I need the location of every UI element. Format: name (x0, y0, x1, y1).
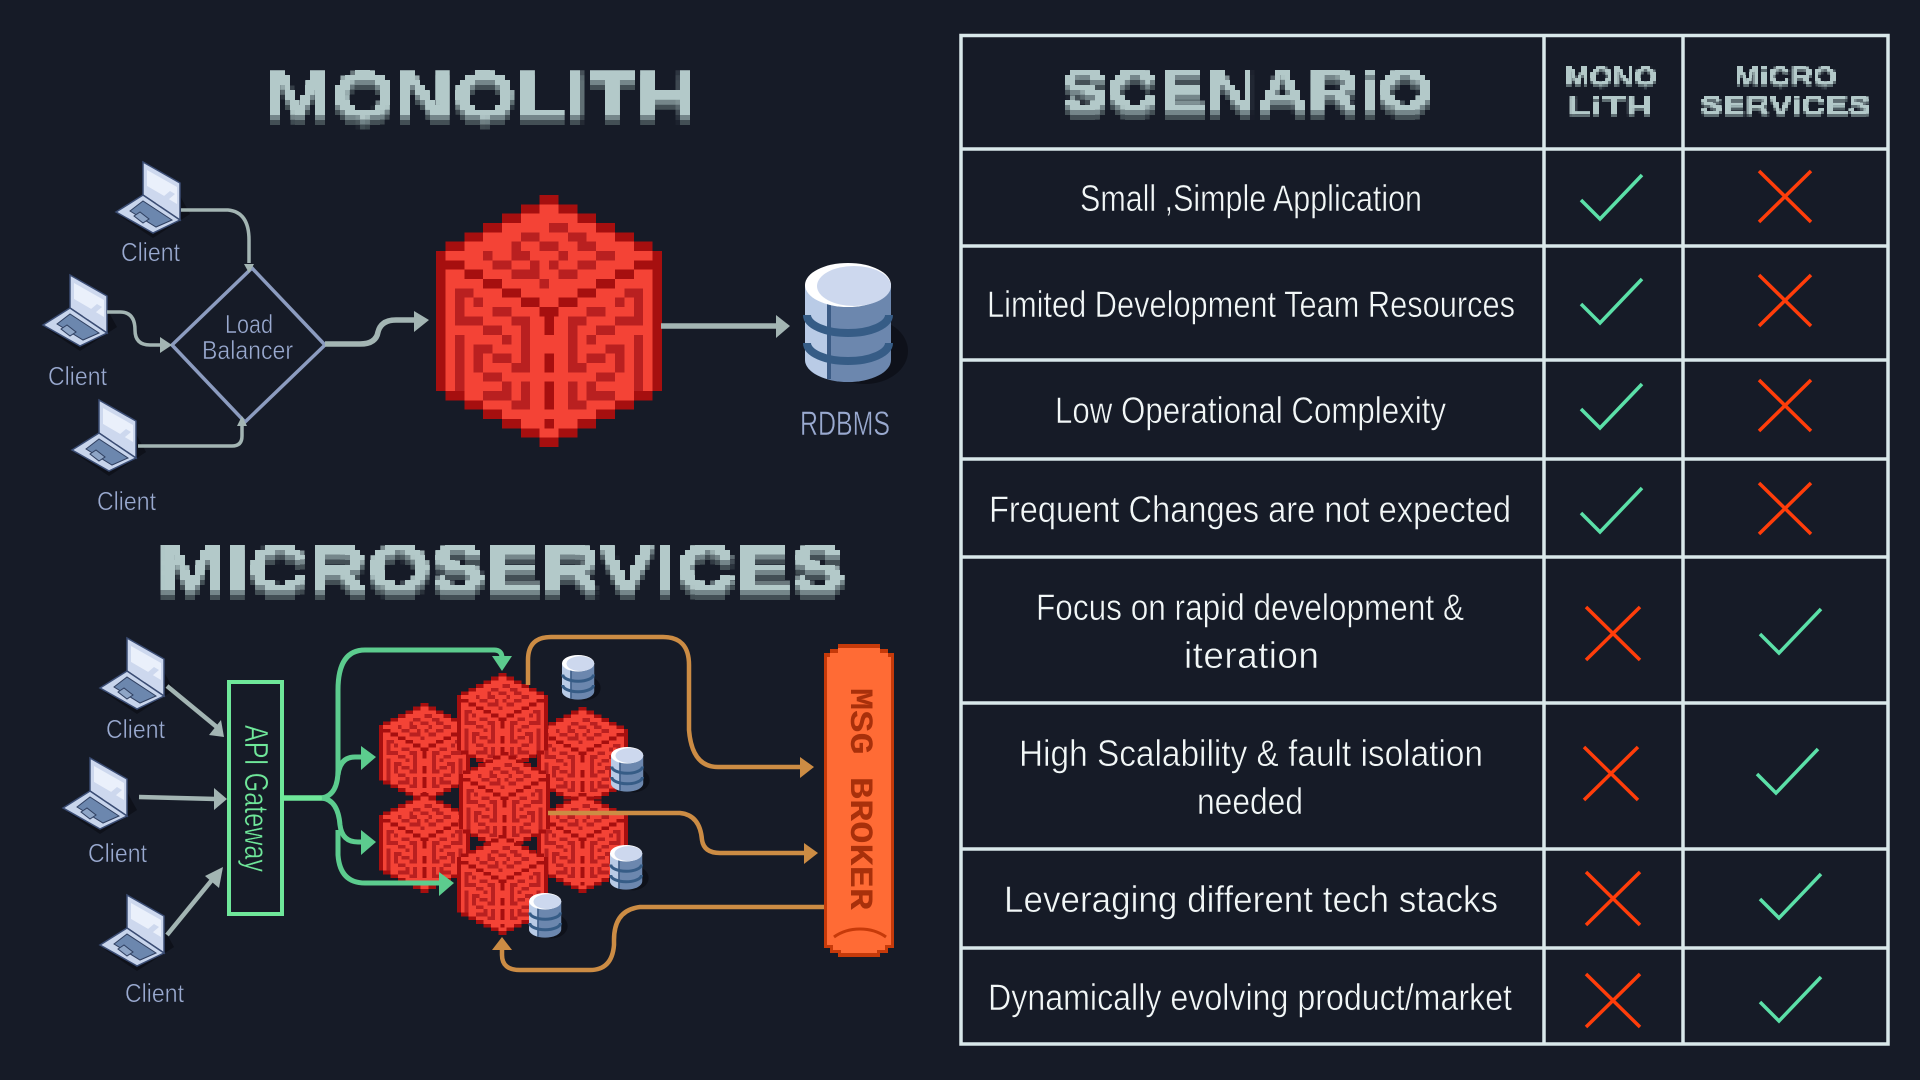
label: rdbms: RDBMS (800, 405, 890, 443)
scenario labels: Dynamically evolving product/market (988, 977, 1513, 1018)
orange broker arrows (492, 637, 824, 970)
arrow: balancer to monolith (325, 311, 429, 344)
header: scenario: SCENARiO (1061, 58, 1433, 121)
panel: comparison table (961, 36, 1888, 1044)
message broker (824, 644, 894, 957)
panel: microservices (63, 531, 894, 1008)
client labels: Client (121, 237, 181, 267)
load balancer diamond: Balancer (202, 335, 293, 365)
table grid (961, 36, 1888, 1044)
green gateway arrows (283, 650, 512, 896)
header: monolith (1565, 61, 1657, 121)
scenario labels: Low Operational Complexity (1055, 390, 1446, 431)
scenario labels: Frequent Changes are not expected (989, 489, 1511, 530)
load balancer diamond (172, 268, 325, 422)
client labels: Client (48, 361, 108, 391)
small databases (529, 655, 650, 938)
icon: laptop 2 (43, 275, 117, 351)
panel: monolith (43, 58, 908, 516)
client laptops (63, 638, 174, 971)
title: microservices: MICROSERVICES (157, 531, 846, 604)
service cubes (379, 673, 628, 935)
api gateway (229, 682, 282, 914)
scenario labels: Limited Development Team Resources (987, 284, 1515, 325)
client labels: Client (88, 838, 148, 868)
icon: laptop 1 (116, 162, 190, 238)
icon: laptop 3 (100, 895, 174, 971)
client labels (48, 237, 181, 516)
client laptops (43, 162, 190, 476)
client labels: Client (106, 714, 166, 744)
client labels: Client (97, 486, 157, 516)
client labels (88, 714, 185, 1008)
icon: laptop 1 (100, 638, 174, 714)
scenario labels (987, 178, 1515, 1018)
header: monolith: LiTH (1568, 91, 1653, 121)
title: monolith: MONOLITH (265, 58, 695, 131)
scenario labels: Leveraging different tech stacks (1004, 879, 1498, 920)
scenario labels: High Scalability & fault isolation (1019, 733, 1483, 774)
load balancer diamond: Load (225, 309, 273, 339)
header: microservices: MiCRO (1734, 61, 1837, 91)
scenario labels: iteration (1184, 635, 1319, 676)
header: monolith: MONO (1565, 61, 1657, 91)
icon: laptop 2 (63, 758, 137, 834)
scenario labels: needed (1197, 781, 1303, 822)
arrows to load balancer (107, 210, 254, 446)
header: microservices: SERViCES (1700, 90, 1871, 120)
header: microservices (1700, 61, 1871, 120)
check marks (1581, 175, 1821, 1021)
scenario labels: Small ,Simple Application (1080, 178, 1422, 219)
arrow: monolith to database (661, 315, 790, 338)
client labels: Client (125, 978, 185, 1008)
icon: laptop 3 (72, 400, 146, 476)
arrows to gateway (139, 686, 227, 935)
icon: database (805, 263, 908, 384)
api gateway: API Gateway (238, 725, 275, 872)
cross marks (1584, 171, 1811, 1027)
icon: monolith cube (436, 195, 662, 447)
message broker: MSG BROKER (841, 688, 878, 911)
scenario labels: Focus on rapid development & (1036, 587, 1464, 628)
